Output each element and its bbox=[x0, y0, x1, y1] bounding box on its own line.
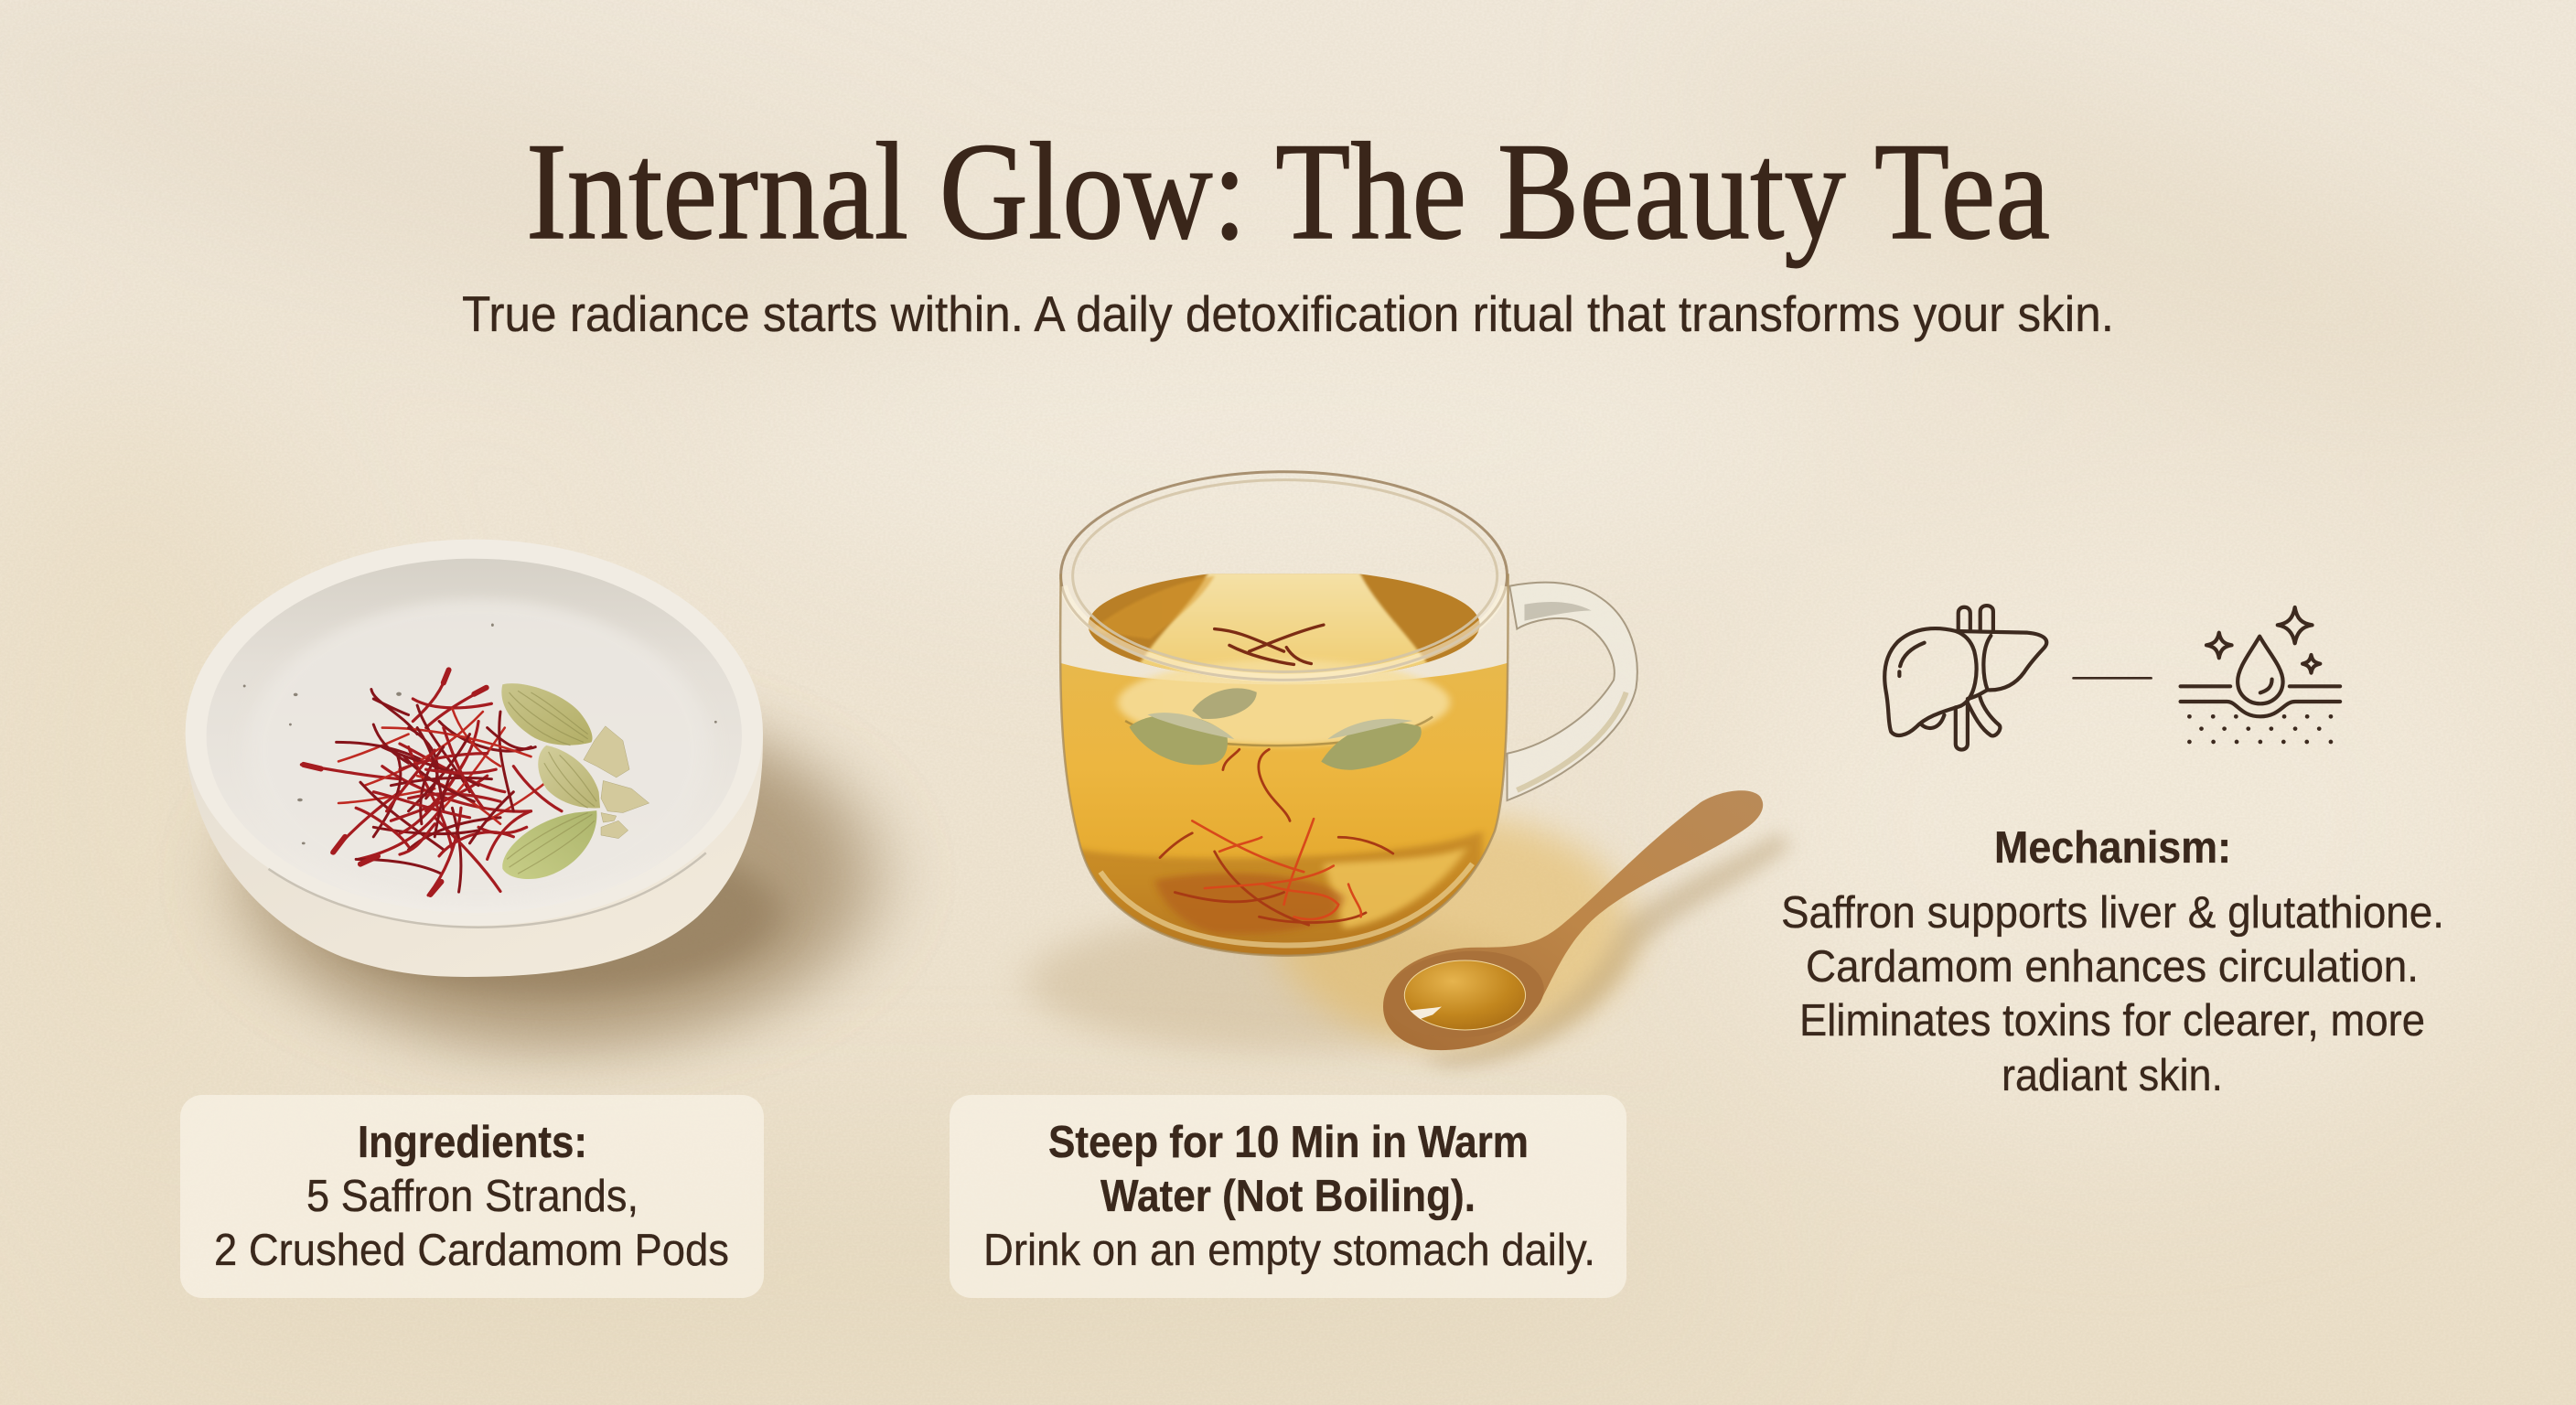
honey bbox=[1404, 960, 1526, 1030]
mechanism line two: Cardamom enhances circulation. bbox=[1806, 942, 2419, 992]
bowl of saffron and cardamom bbox=[186, 540, 873, 1048]
icons: liver to skin bbox=[1884, 606, 2340, 750]
cup body glass bbox=[1060, 574, 1508, 956]
bowl rim bbox=[186, 540, 763, 926]
honey highlight bbox=[1411, 1006, 1442, 1019]
connecting line bbox=[2074, 677, 2152, 680]
icon: liver bbox=[1884, 606, 2046, 750]
tea liquid bbox=[1056, 557, 1512, 961]
floating saffron strands bbox=[1215, 625, 1324, 820]
steep heading line one: Steep for 10 Min in Warm bbox=[1048, 1118, 1529, 1167]
glass handle bbox=[1508, 583, 1637, 800]
mechanism line four: radiant skin. bbox=[2002, 1051, 2223, 1100]
cardamom pod bottom bbox=[502, 810, 596, 879]
steep instruction: Drink on an empty stomach daily. bbox=[983, 1226, 1595, 1275]
bowl shadow bbox=[242, 702, 873, 1048]
icon: skin with droplet and sparkles bbox=[2181, 607, 2340, 744]
cup rim bbox=[1060, 472, 1508, 956]
mechanism line one: Saffron supports liver & glutathione. bbox=[1781, 888, 2444, 938]
bowl interior bbox=[207, 559, 742, 913]
cardamom pods in tea bbox=[1129, 688, 1422, 770]
mechanism heading: Mechanism: bbox=[1994, 823, 2231, 873]
title: Internal Glow: The Beauty Tea bbox=[526, 114, 2050, 268]
steep heading line two: Water (Not Boiling). bbox=[1100, 1172, 1476, 1221]
glass cup of tea bbox=[1026, 472, 1637, 1052]
subtitle: True radiance starts within. A daily detoxification ritual that transforms your skin. bbox=[462, 285, 2114, 342]
cardamom pod top bbox=[501, 683, 593, 745]
cardamom pod middle bbox=[538, 745, 600, 808]
steeped saffron at bottom bbox=[1160, 819, 1393, 925]
saffron pile bbox=[301, 670, 566, 896]
mechanism text block bbox=[1781, 823, 2444, 1100]
crushed cardamom husks bbox=[584, 726, 649, 839]
spoon bowl hollow bbox=[1379, 943, 1551, 1046]
ceramic speckles bbox=[243, 624, 717, 844]
ingredients heading: Ingredients: bbox=[358, 1118, 587, 1167]
wooden spoon with honey bbox=[1379, 790, 1790, 1067]
mechanism line three: Eliminates toxins for clearer, more bbox=[1799, 996, 2425, 1046]
card: steeping instructions bbox=[950, 1095, 1626, 1298]
spoon shadow bbox=[1418, 831, 1790, 1067]
bowl body bbox=[186, 733, 763, 977]
spoon wood bbox=[1383, 790, 1763, 1050]
ingredients line two: 2 Crushed Cardamom Pods bbox=[214, 1226, 729, 1275]
ingredients line one: 5 Saffron Strands, bbox=[306, 1172, 639, 1221]
card: ingredients bbox=[180, 1095, 764, 1298]
warm light and shadow under cup bbox=[1026, 815, 1631, 1052]
